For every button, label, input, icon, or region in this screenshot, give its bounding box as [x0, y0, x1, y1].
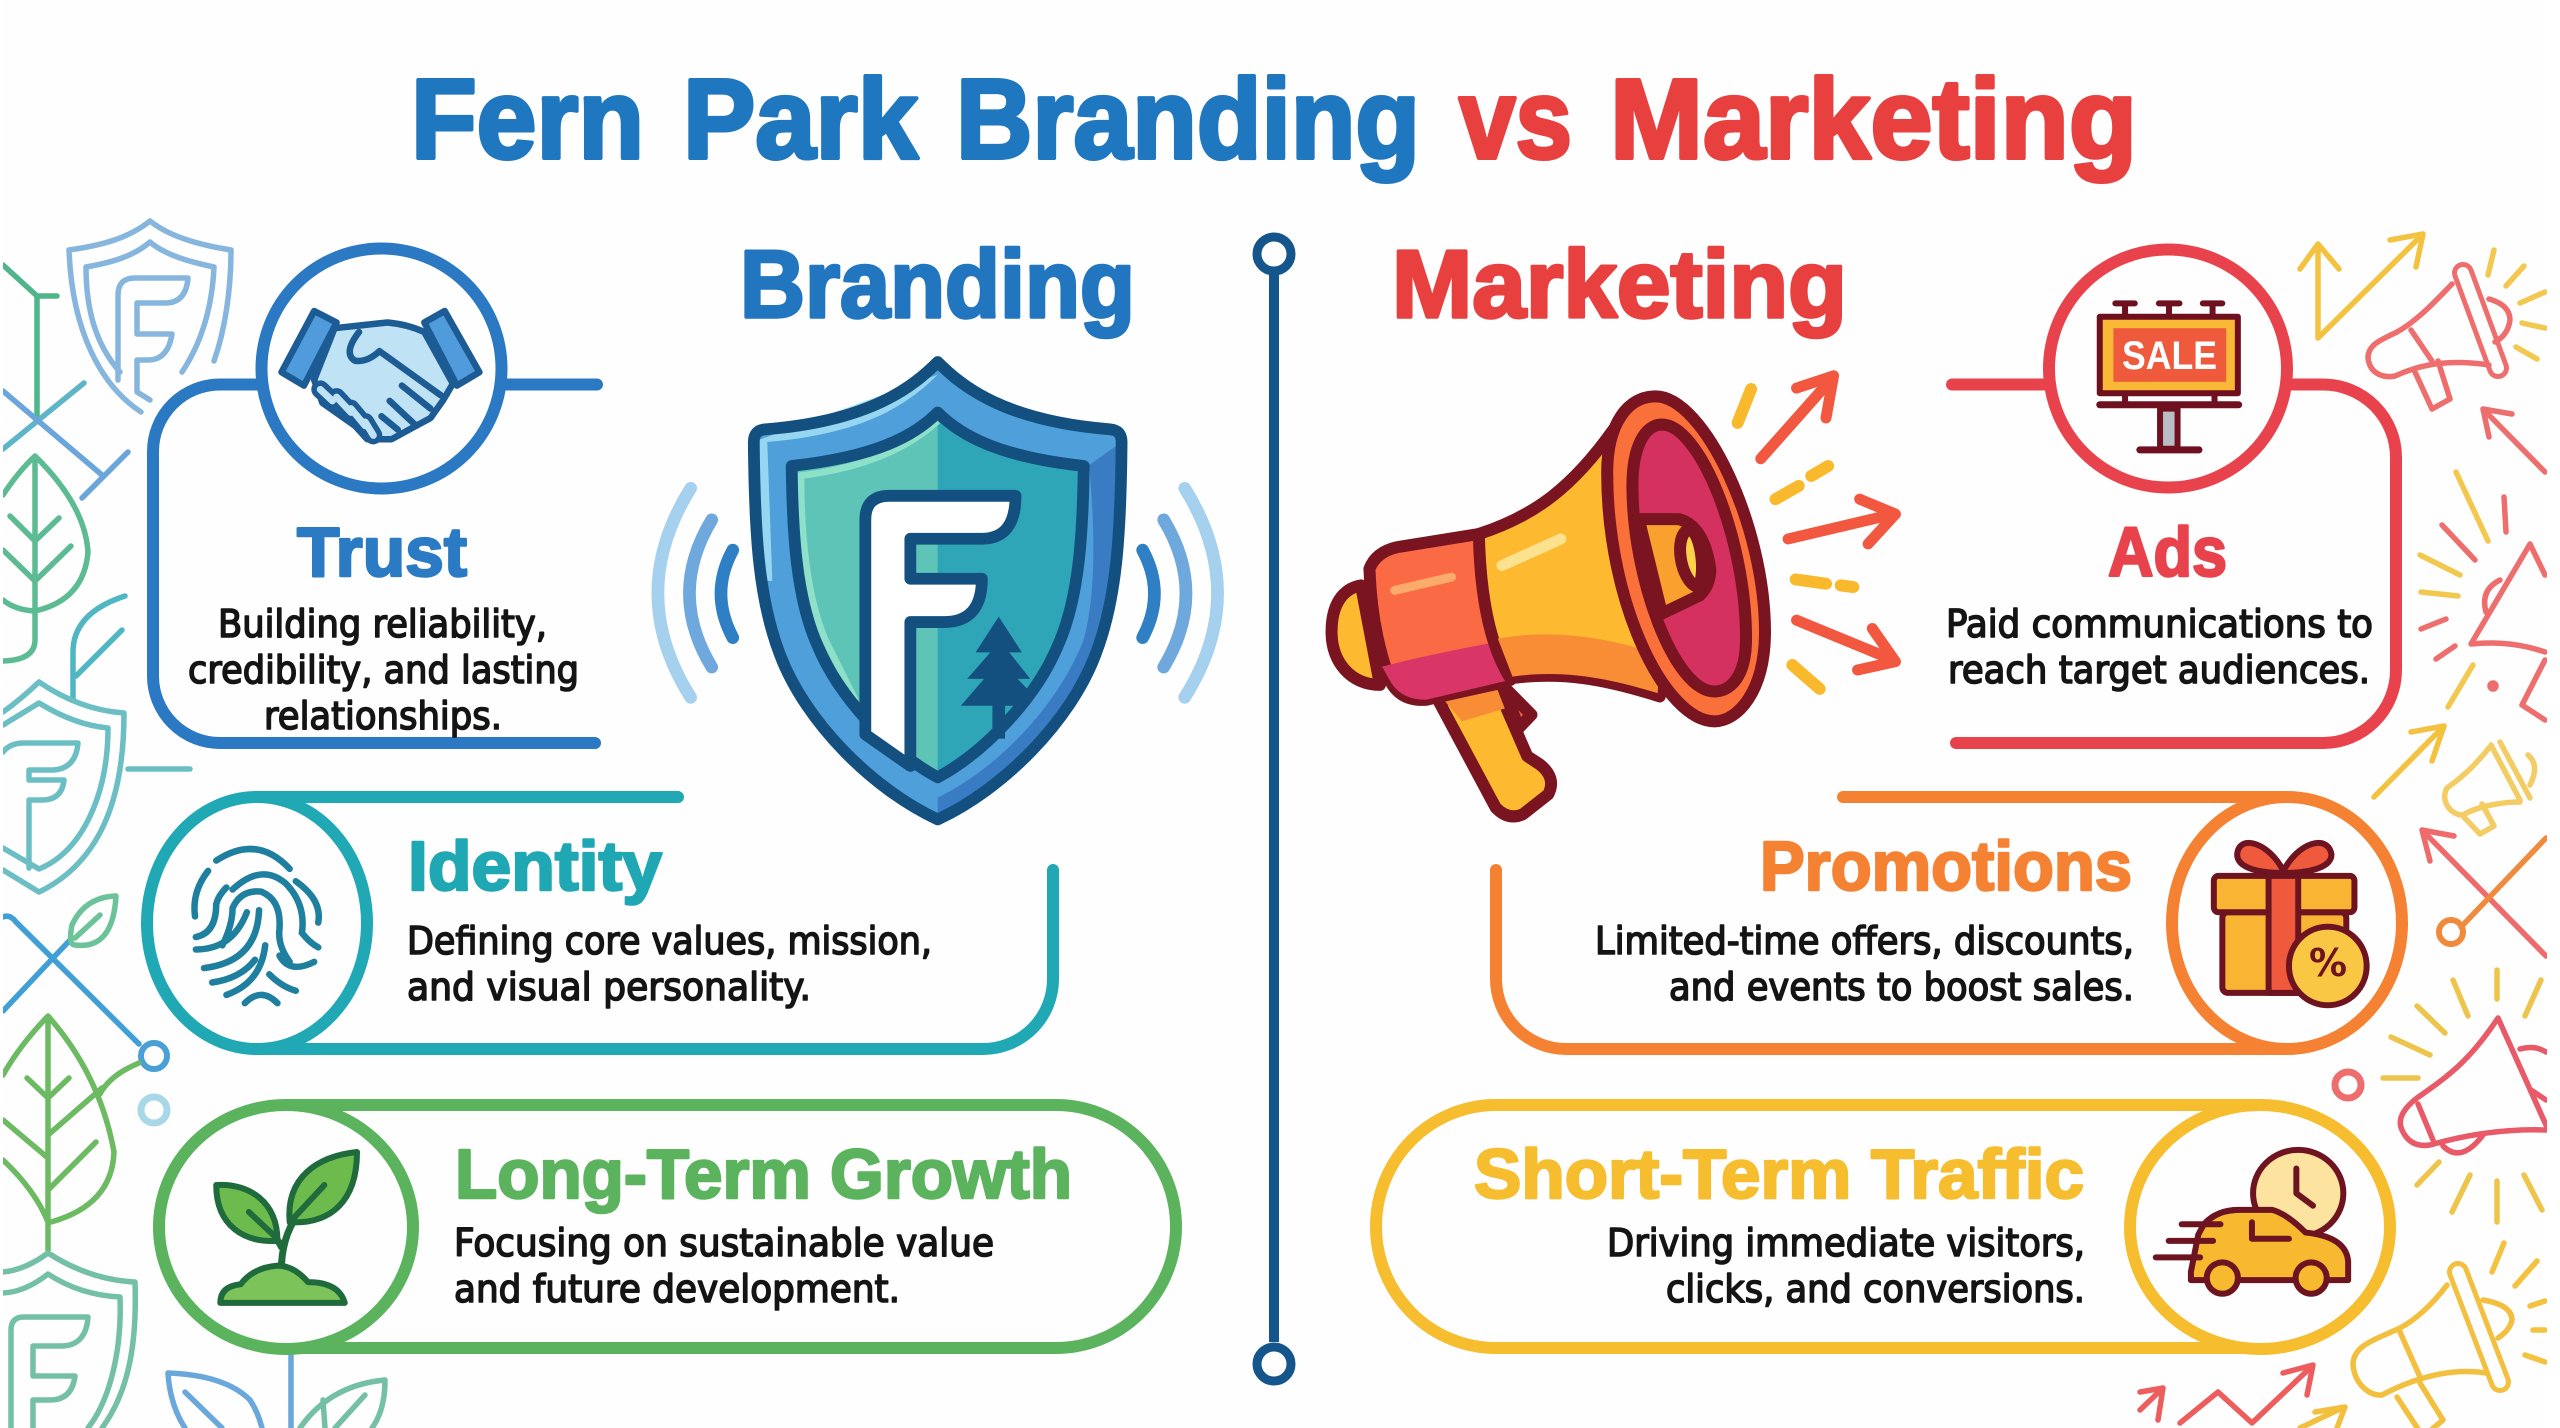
panel: Trust: Building reliability, — [218, 602, 547, 646]
panel: Long-Term Growth — [159, 1105, 1176, 1349]
central divider with end rings — [1257, 237, 1291, 1381]
panel: Trust: credibility, and lasting — [188, 648, 579, 692]
background decoration: left branding outline icons — [3, 221, 385, 1428]
icon: fingerprint — [194, 849, 319, 1003]
icon: sprout — [216, 1152, 357, 1303]
title: Fern — [411, 56, 644, 182]
panel: Ads — [1946, 250, 2396, 743]
panel: Ads: Paid communications to — [1946, 602, 2373, 646]
panel: Promotions: Limited-time offers, discounts, — [1595, 919, 2134, 963]
panel: Promotions: Promotions — [1760, 827, 2132, 905]
panel: Trust: relationships. — [264, 694, 502, 738]
panel: Promotions: and events to boost sales. — [1669, 965, 2134, 1009]
icon: brand shield with sound waves — [658, 362, 1218, 819]
panel: Identity — [147, 797, 1053, 1049]
icon: handshake — [282, 311, 479, 439]
panel: Long-Term Growth: Focusing on sustainable value — [454, 1221, 994, 1265]
panel: Long-Term Growth: Long-Term Growth — [455, 1135, 1072, 1213]
panel: Long-Term Growth: and future development. — [454, 1267, 900, 1311]
panel: Short-Term Traffic: clicks, and conversions. — [1666, 1267, 2085, 1311]
panel: Short-Term Traffic: Driving immediate visitors, — [1607, 1221, 2085, 1265]
panel: Ads: reach target audiences. — [1948, 648, 2370, 692]
icon: SALE billboard: SALE — [2122, 334, 2217, 378]
icon: megaphone with arrows — [1332, 376, 1895, 816]
panel: Short-Term Traffic — [1376, 1105, 2390, 1349]
title — [411, 56, 2137, 182]
heading: Marketing: Marketing — [1392, 231, 1847, 338]
icon: speeding car and clock — [2156, 1150, 2348, 1294]
panel: Identity: Defining core values, mission, — [407, 919, 932, 963]
panel: Promotions — [1496, 797, 2402, 1049]
panel: Short-Term Traffic: Short-Term Traffic — [1474, 1135, 2084, 1213]
title: Branding — [956, 56, 1420, 182]
panel: Identity: and visual personality. — [407, 965, 811, 1009]
icon: SALE billboard — [2100, 303, 2239, 450]
icon: gift box: % — [2309, 941, 2347, 985]
panel: Identity: Identity — [408, 827, 662, 905]
panel: Trust: Trust — [297, 513, 467, 591]
background decoration: right marketing outline icons — [2140, 234, 2546, 1428]
title: Park — [683, 56, 918, 182]
panel: Ads: Ads — [2108, 513, 2227, 591]
title: vs — [1459, 56, 1572, 182]
heading: Branding: Branding — [740, 231, 1135, 338]
icon: gift box — [2214, 843, 2367, 1005]
panel: Trust — [153, 248, 597, 743]
title: Marketing — [1610, 56, 2137, 182]
